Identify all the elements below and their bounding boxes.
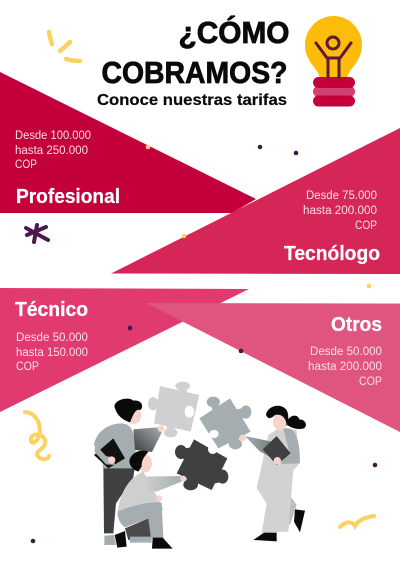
Profesional price: COP [15, 159, 37, 171]
Técnico heading: Técnico [15, 299, 88, 321]
Profesional price: Desde 100.000 [15, 130, 91, 142]
illustration: team assembling a puzzle [94, 382, 306, 549]
Tecnólogo price: hasta 200.000 [303, 205, 377, 217]
Tecnólogo price: COP [355, 220, 377, 232]
person: crouching man [115, 451, 186, 549]
panel: Técnico [0, 288, 249, 412]
Técnico price: Desde 50.000 [16, 332, 88, 344]
Otros price [308, 346, 382, 388]
decoration: yellow dashes [49, 32, 80, 61]
puzzle piece: dark [175, 439, 228, 490]
decoration: yellow squiggle [25, 412, 49, 459]
panel: Otros [146, 303, 400, 432]
icon: light bulb with person [305, 16, 362, 106]
decoration: yellow swirl [340, 516, 374, 527]
title [102, 14, 290, 90]
Profesional price [15, 130, 91, 171]
Técnico price [16, 332, 88, 373]
Tecnólogo price: Desde 75.000 [306, 190, 377, 202]
puzzle piece: medium [199, 397, 251, 449]
title: ¿CÓMO [178, 14, 290, 50]
decoration: dots [31, 145, 377, 543]
Tecnólogo heading: Tecnólogo [284, 243, 380, 265]
Otros price: Desde 50.000 [310, 346, 382, 358]
title: COBRAMOS? [102, 55, 288, 90]
Otros heading: Otros [331, 314, 382, 336]
Técnico price: hasta 150.000 [16, 347, 88, 359]
Profesional price: hasta 250.000 [15, 145, 88, 157]
Técnico price: COP [16, 361, 39, 373]
person: standing man [94, 399, 164, 545]
puzzle piece: light [148, 382, 199, 437]
subtitle: Conoce nuestras tarifas [97, 92, 287, 109]
person: woman [239, 406, 306, 541]
panel: Tecnólogo [111, 128, 400, 274]
panel: Profesional [0, 72, 256, 213]
Otros price: COP [359, 376, 382, 388]
decoration: purple asterisk [26, 225, 48, 242]
Profesional heading: Profesional [16, 186, 120, 208]
Otros price: hasta 200.000 [308, 361, 382, 373]
Tecnólogo price [303, 190, 377, 232]
